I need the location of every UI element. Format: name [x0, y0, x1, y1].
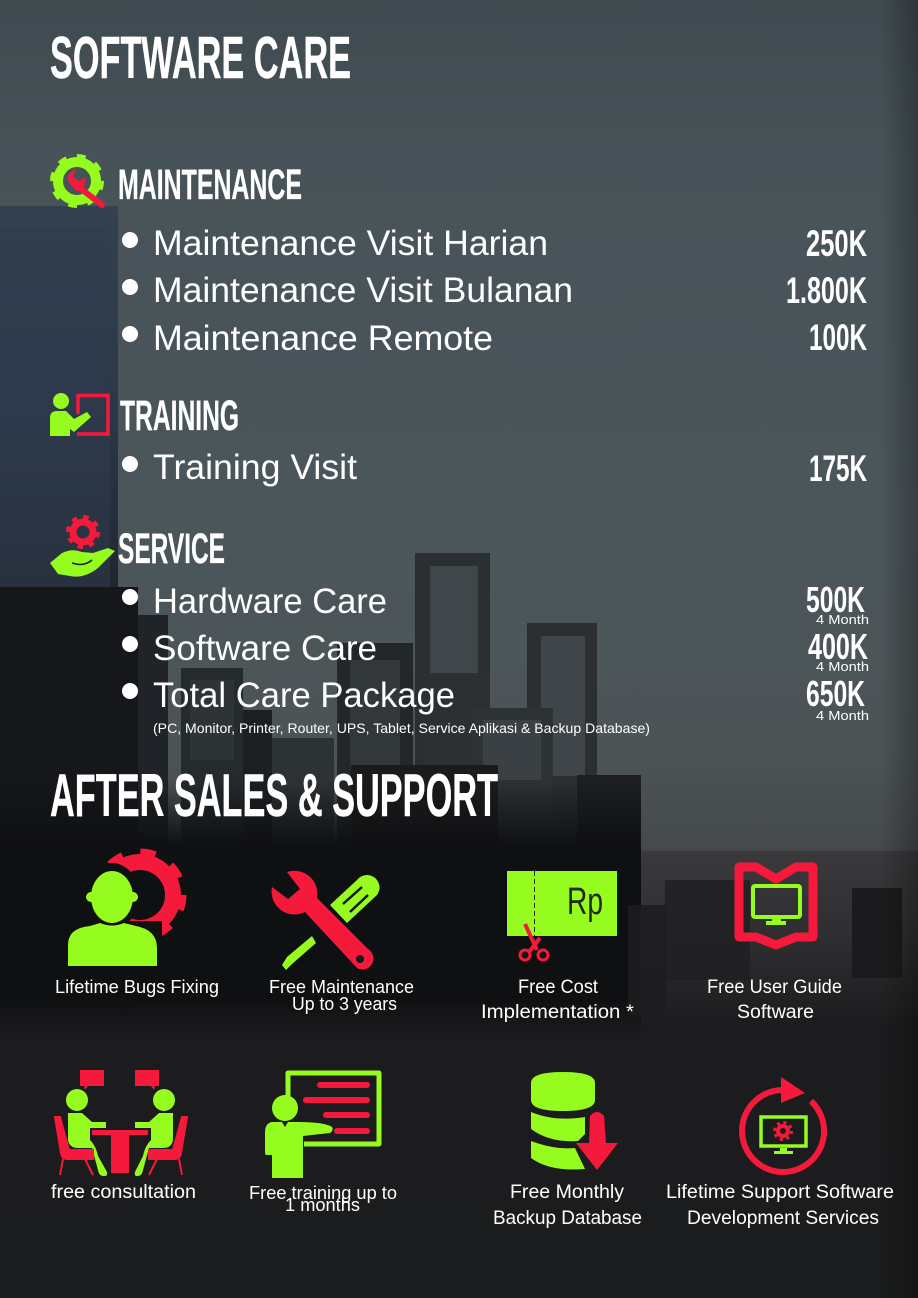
item: software care	[122, 626, 869, 674]
section: service	[50, 517, 869, 736]
icon: voucher with scissors	[507, 871, 617, 960]
item: training visit: 175K	[809, 448, 867, 489]
item: maintenance remote: Maintenance Remote	[153, 319, 493, 358]
icon: hand holding gear	[50, 517, 115, 577]
label: Software	[737, 1002, 814, 1023]
benefit: free consultation	[51, 1070, 196, 1203]
label: Lifetime Bugs Fixing	[55, 977, 219, 997]
section: maintenance	[53, 157, 867, 358]
item: maintenance visit harian	[122, 223, 867, 264]
item: total care package	[122, 673, 869, 736]
label	[481, 977, 635, 1023]
icon: presenter at board	[265, 1073, 379, 1178]
benefit: free training	[249, 1073, 397, 1215]
item: hardware care: 4 Month	[816, 612, 869, 627]
label	[249, 1183, 397, 1215]
item: total care package: 650K	[806, 673, 865, 714]
item: total care package: (PC, Monitor, Printer, Router, UPS, Tablet, Service Aplikasi & Backup Database)	[153, 720, 650, 736]
label	[666, 1182, 894, 1229]
label: Free training up to	[249, 1183, 397, 1203]
label: Free User Guide	[707, 977, 842, 998]
item: total care package: Total Care Package	[153, 676, 455, 715]
icon: wrench and screwdriver	[272, 871, 379, 970]
item: hardware care: Hardware Care	[153, 582, 387, 621]
icon: gear and wrench	[53, 157, 102, 205]
icon: two people at a table	[55, 1070, 187, 1176]
label	[269, 977, 414, 1014]
icon: database with arrow	[531, 1072, 618, 1170]
item: software care: 400K	[808, 626, 868, 667]
benefit: free monthly backup	[493, 1072, 642, 1229]
item: training visit: Training Visit	[153, 448, 357, 487]
section: training	[50, 392, 867, 489]
label	[707, 977, 842, 1023]
heading: service: SERVICE	[118, 525, 225, 573]
icon: circular arrow and monitor	[742, 1077, 824, 1172]
label: free consultation	[51, 1182, 196, 1203]
label: Implementation *	[481, 1002, 635, 1023]
item: hardware care: 500K	[806, 579, 865, 620]
title: software care: SOFTWARE CARE	[50, 25, 351, 91]
benefit: free user guide	[707, 867, 842, 1023]
item: software care: Software Care	[153, 629, 377, 668]
item: hardware care	[122, 579, 869, 627]
item: maintenance remote: 100K	[809, 317, 867, 358]
item: maintenance visit harian: 250K	[806, 223, 867, 264]
item: maintenance visit harian: Maintenance Visit Harian	[153, 224, 548, 263]
item: software care: 4 Month	[816, 659, 869, 674]
label: Backup Database	[493, 1208, 642, 1229]
heading: maintenance: MAINTENANCE	[118, 161, 302, 209]
item: total care package: 4 Month	[816, 708, 869, 723]
item: maintenance visit bulanan: Maintenance Visit Bulanan	[153, 271, 573, 310]
item: maintenance remote	[122, 317, 867, 358]
item: maintenance visit bulanan	[122, 270, 867, 311]
label	[493, 1182, 642, 1229]
item: training visit	[122, 448, 867, 489]
label: Free Monthly	[510, 1182, 625, 1203]
icon: person with gear	[68, 853, 182, 971]
benefit: lifetime bugs fixing	[55, 853, 219, 997]
label: Lifetime Support Software	[666, 1182, 894, 1203]
icon: voucher with scissors: Rp	[567, 881, 603, 923]
icon: book with monitor	[739, 867, 813, 945]
icon: trainer at board	[50, 393, 108, 436]
item: maintenance visit bulanan: 1.800K	[786, 270, 867, 311]
label: Free Maintenance	[269, 977, 414, 997]
label: Free Cost	[518, 977, 599, 998]
heading: after sales and support: AFTER SALES & SUPPORT	[50, 762, 498, 829]
label: Development Services	[687, 1208, 879, 1229]
label: Up to 3 years	[292, 994, 397, 1014]
label: 1 months	[285, 1195, 360, 1215]
heading: training: TRAINING	[120, 392, 239, 440]
benefit: free cost implementation	[481, 871, 635, 1023]
benefit: free maintenance	[269, 871, 414, 1014]
benefit: lifetime support	[666, 1077, 894, 1229]
